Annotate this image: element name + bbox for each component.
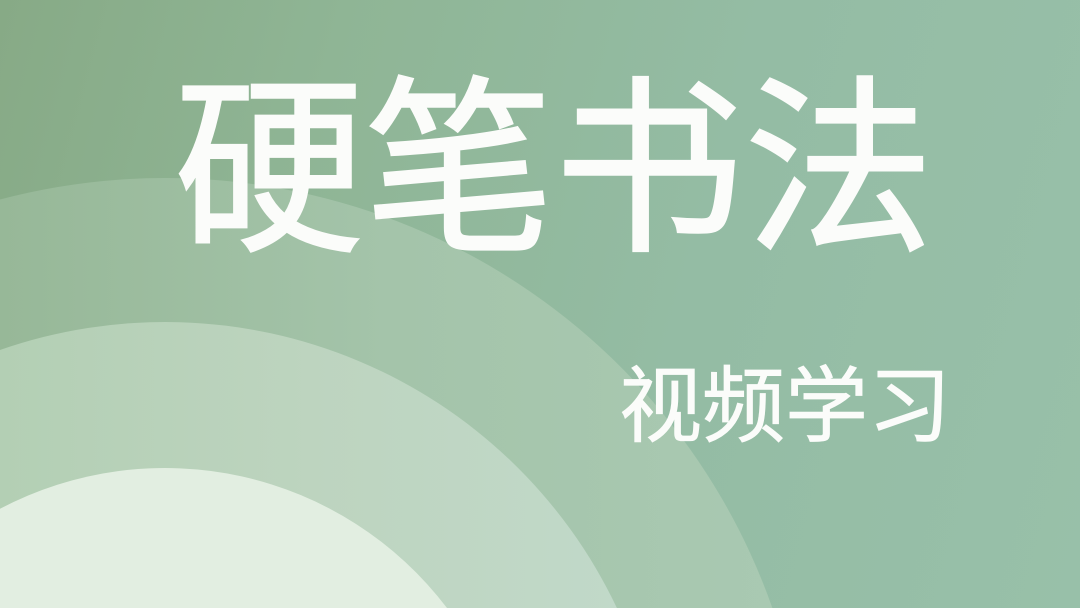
title: 硬笔书法 bbox=[174, 65, 934, 277]
middle arc bbox=[0, 322, 617, 608]
outer arc bbox=[0, 178, 772, 608]
inner arc bbox=[0, 468, 447, 608]
subtitle: 视频学习 bbox=[619, 360, 951, 453]
